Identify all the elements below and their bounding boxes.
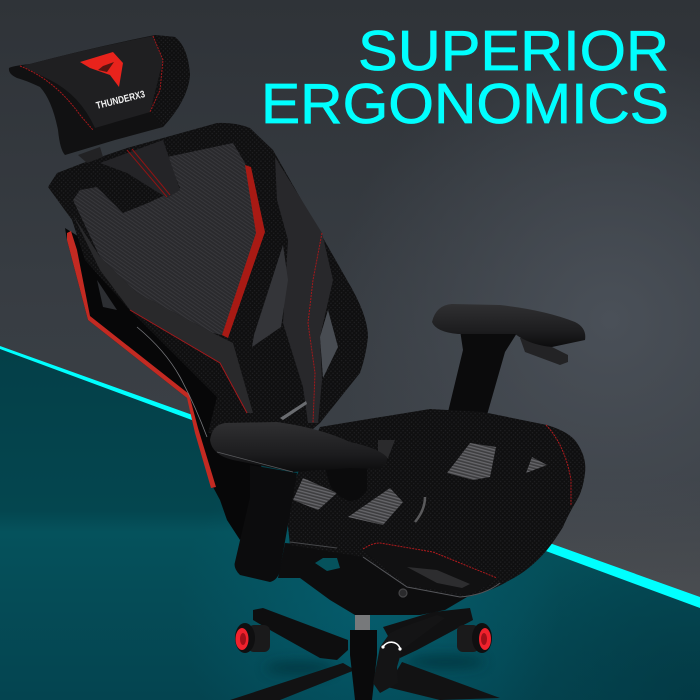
- headrest stitching: [20, 36, 163, 130]
- red frame band: [67, 231, 216, 488]
- rear arm lever: [520, 336, 568, 365]
- neck stitching: [127, 149, 170, 197]
- backrest shell: [48, 123, 368, 440]
- floor shadow: [265, 655, 485, 675]
- base leg front right: [387, 662, 500, 700]
- seat lip: [363, 543, 497, 595]
- diagonal gray strut: [280, 401, 307, 420]
- front arm post: [235, 465, 297, 582]
- arm pivot: [325, 468, 367, 501]
- tilt lever: [373, 615, 445, 693]
- seat mesh dark patch: [378, 440, 395, 458]
- column stitching: [308, 233, 322, 423]
- cyan diagonal stripe: [0, 346, 700, 608]
- title: SUPERIOR: [358, 19, 669, 83]
- base leg left: [253, 608, 348, 660]
- mechanism bolt: [399, 589, 407, 597]
- logo cut: [98, 62, 114, 72]
- seat cushion: [285, 409, 585, 597]
- red back strip: [222, 165, 265, 338]
- base hub: [350, 630, 377, 700]
- front arm pad: [210, 422, 387, 472]
- rear frame: [65, 228, 262, 540]
- rear arm pad: [432, 304, 585, 347]
- teal floor: [0, 347, 700, 700]
- seat rim: [363, 557, 500, 597]
- title: [261, 19, 669, 136]
- headrest side mesh: [150, 35, 190, 127]
- headrest cushion: [9, 35, 190, 155]
- right caster: [457, 623, 492, 653]
- rear arm post: [448, 330, 517, 415]
- left caster: [235, 623, 270, 653]
- title: ERGONOMICS: [261, 72, 669, 136]
- neck panel: [100, 140, 180, 198]
- backrest: [48, 123, 368, 440]
- brand text: THUNDERX3: [95, 89, 147, 112]
- seat: [285, 409, 585, 597]
- lower back band: [73, 215, 253, 413]
- wall seen through back: [320, 310, 338, 378]
- headrest panel: [22, 36, 163, 128]
- band stitching: [130, 310, 247, 413]
- seat under mesh: [407, 567, 470, 588]
- frame highlight: [137, 327, 207, 437]
- front armrest: [210, 422, 387, 582]
- headrest: [9, 35, 190, 163]
- seat mesh patch centre: [447, 443, 496, 480]
- base leg right: [383, 608, 473, 658]
- teal gap in mechanism: [315, 558, 340, 571]
- headrest mount: [78, 147, 103, 163]
- right column panel: [275, 157, 333, 423]
- frame slot: [97, 280, 117, 310]
- seat mechanism: [278, 543, 467, 615]
- rear armrest: [432, 304, 585, 415]
- gray window panel: [252, 245, 288, 347]
- seat stitching: [363, 425, 571, 578]
- base leg front left: [230, 663, 355, 700]
- ThunderX3 logo mark: [80, 52, 123, 87]
- gas cylinder: [355, 615, 370, 632]
- central mesh panel: [73, 143, 260, 335]
- seat mesh patch right: [526, 457, 547, 473]
- seat mesh patch under arm: [293, 478, 337, 510]
- chair: [9, 35, 585, 700]
- seat mesh patch left: [348, 488, 403, 525]
- seat mesh logo mark: [415, 497, 425, 522]
- pad highlight: [217, 452, 293, 472]
- chair base: [230, 608, 500, 700]
- mechanism rim: [290, 542, 337, 548]
- icon: rotate arrow: [382, 642, 401, 650]
